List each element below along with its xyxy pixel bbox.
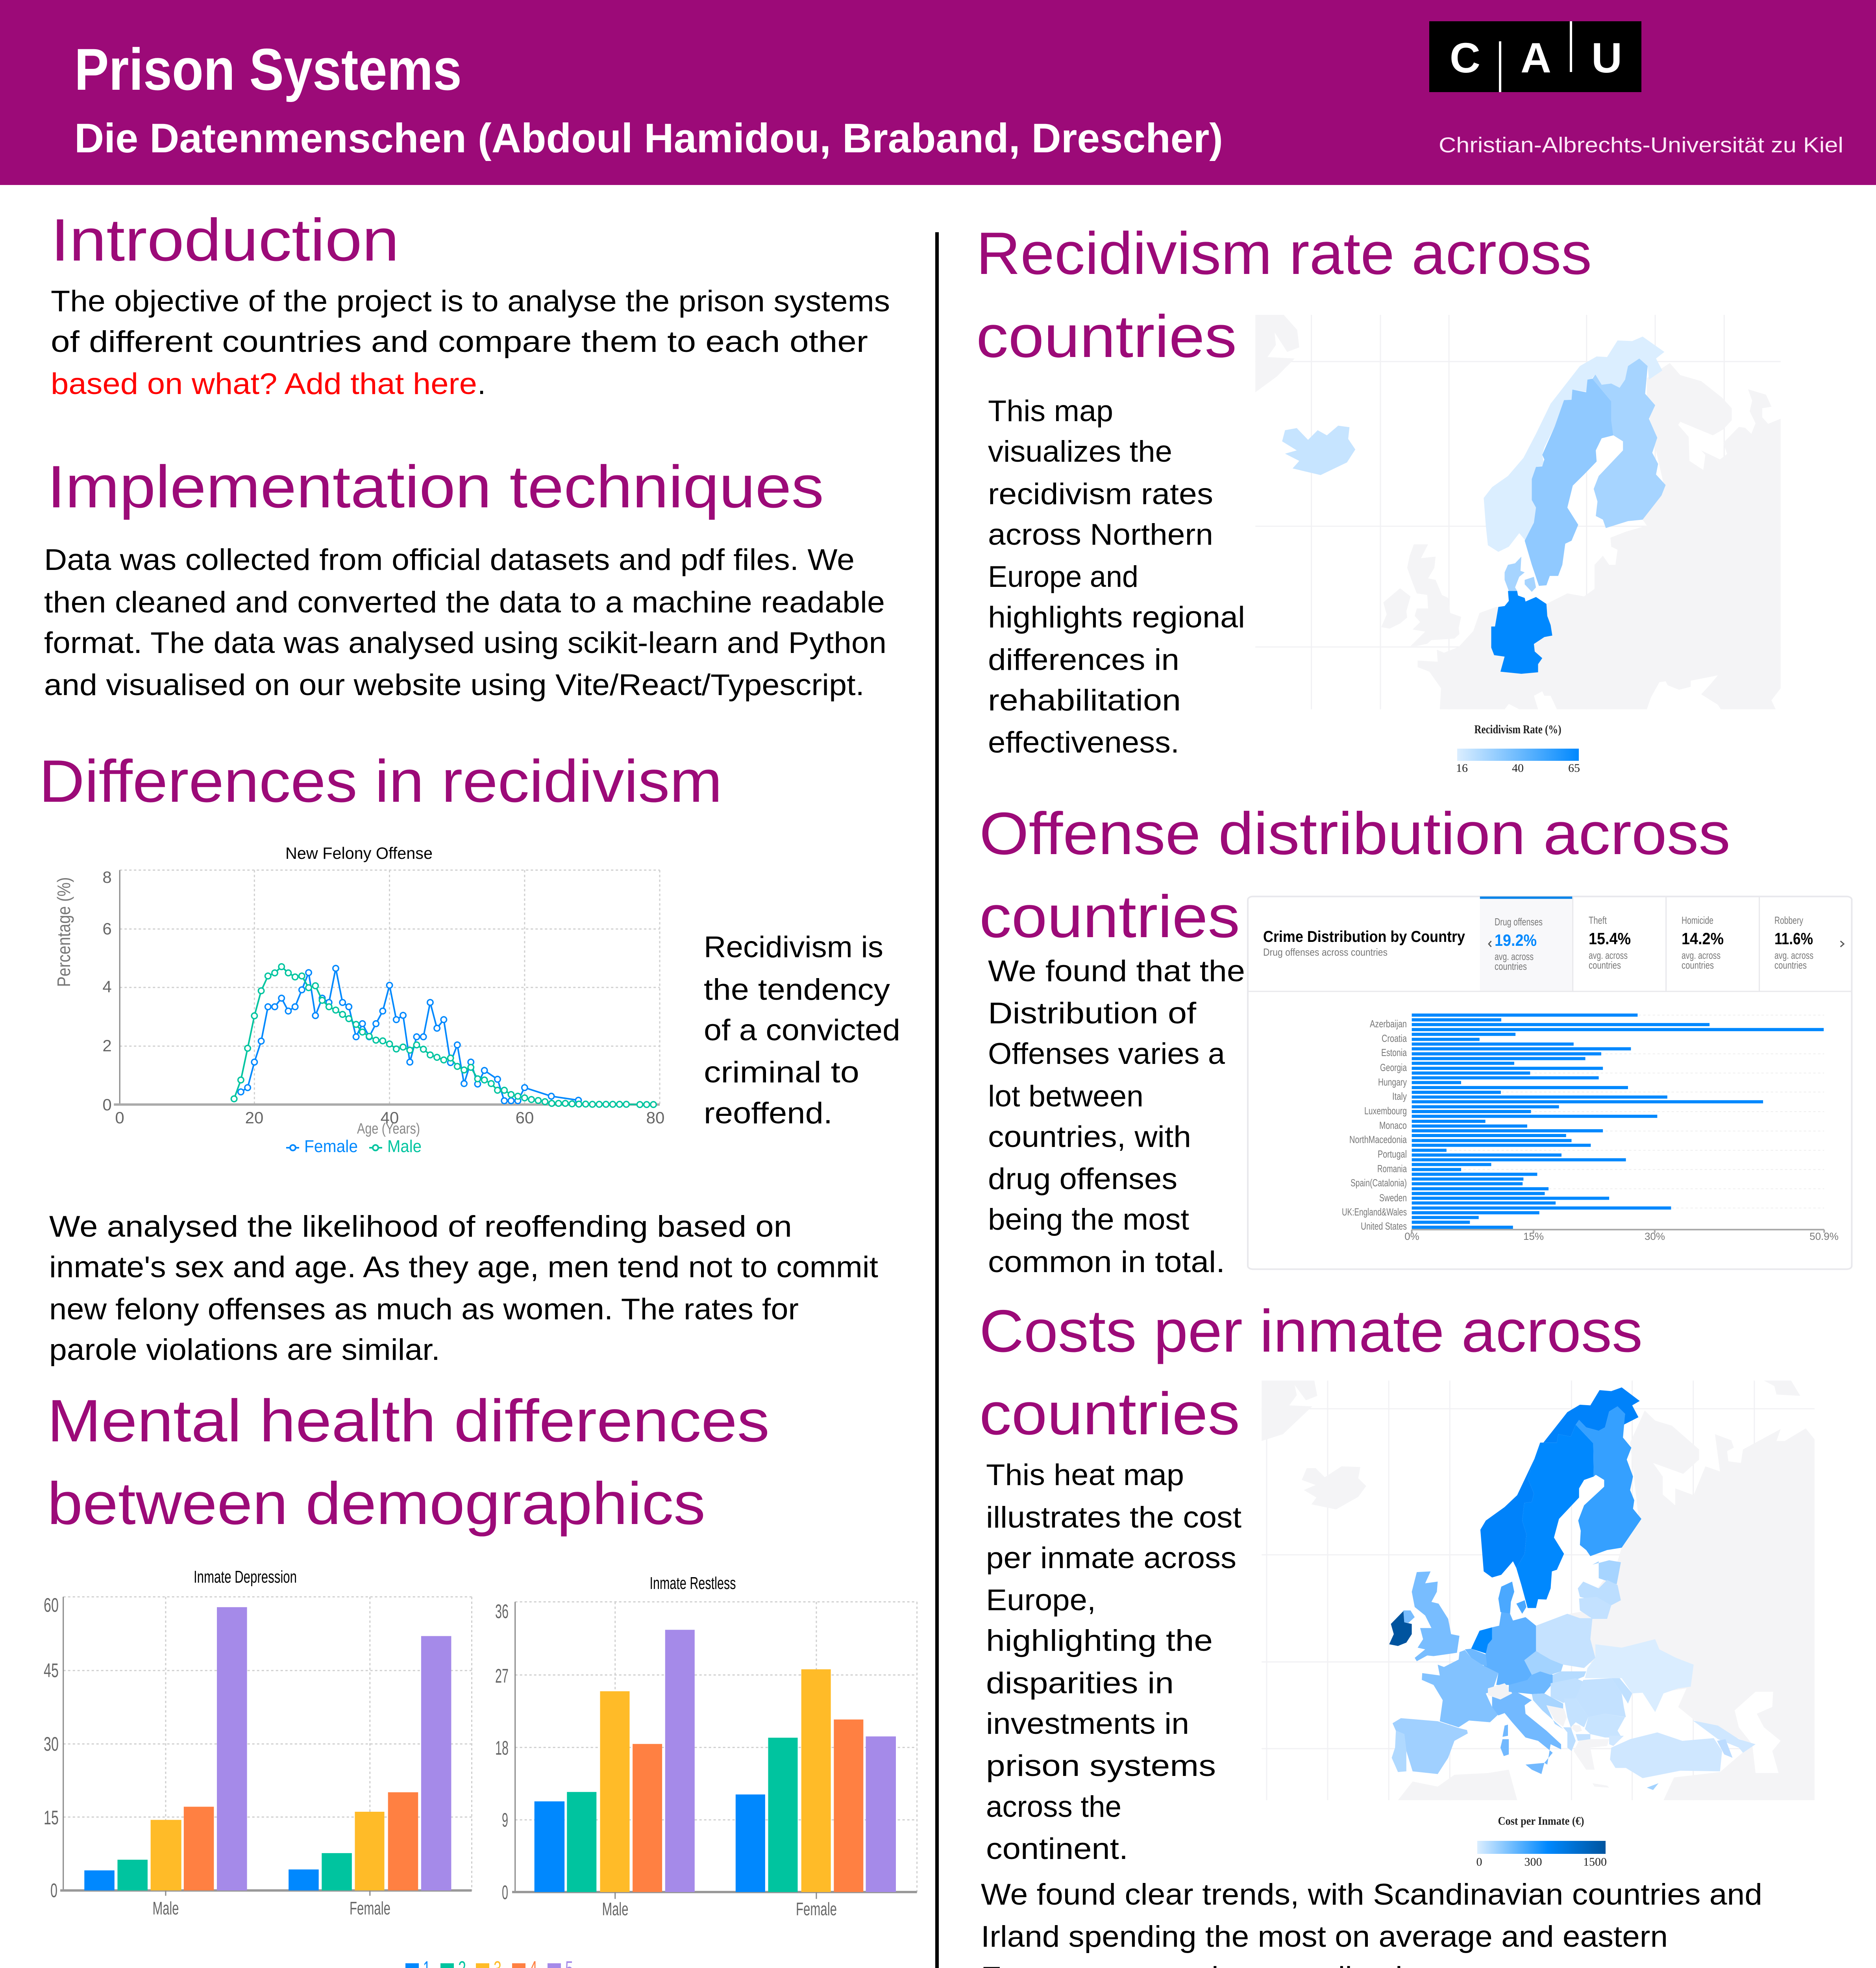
text: recidivism definition: the tendency xyxy=(704,973,890,1006)
legend: recidivism rate xyxy=(1456,722,1580,775)
map: recidivism rate northern Europe xyxy=(1255,315,1781,775)
text: cost trends xyxy=(981,1878,1762,1968)
text: recidivism map description: rehabilitation xyxy=(988,684,1181,717)
text: cost map description: per inmate across xyxy=(986,1541,1236,1575)
chart: inmate depression bars: 45 xyxy=(44,1659,59,1681)
text: recidivism definition: Recidivism is xyxy=(704,930,883,964)
country: Sweden xyxy=(1525,379,1613,586)
text: reoffending analysis: We analysed the likelihood of reoffending based on xyxy=(49,1210,792,1243)
chart: inmate restless bars: Male xyxy=(602,1899,628,1919)
legend: female / male: Male xyxy=(387,1137,422,1156)
bar chart labels: Croatia xyxy=(1382,1032,1407,1044)
text: recidivism map description: across Northern xyxy=(988,518,1213,551)
text: offense distribution description xyxy=(988,954,1245,1279)
text: reoffending analysis: new felony offenses as much as women. The rates for xyxy=(49,1293,799,1326)
card title: Crime Distribution by Country xyxy=(1263,928,1465,945)
text: cost trends: We found clear trends, with Scandinavian countries and xyxy=(981,1878,1762,1911)
text: recidivism map description: recidivism rates xyxy=(988,477,1213,511)
country: Sweden xyxy=(1516,1425,1594,1608)
text: recidivism map description: differences in xyxy=(988,643,1179,677)
legend: recidivism rate: Recidivism Rate (%) xyxy=(1475,722,1561,736)
text: offense distribution description: common in total. xyxy=(988,1245,1225,1279)
chart: new felony offense line chart: 60 xyxy=(516,1108,534,1127)
tab: drug offenses: avg. across xyxy=(1495,951,1534,962)
country: Germany xyxy=(1491,591,1552,674)
text: cost map description: illustrates the cost xyxy=(986,1501,1241,1534)
icon: CAU logo: U xyxy=(1591,34,1622,81)
text: recidivism definition: of a convicted xyxy=(704,1014,900,1047)
tab: drug offenses: countries xyxy=(1495,960,1527,972)
tab: theft: Theft xyxy=(1589,914,1607,926)
authors subtitle: Die Datenmenschen (Abdoul Hamidou, Braband, Drescher) xyxy=(74,115,1223,161)
text: implementation xyxy=(44,543,886,702)
bar chart labels: 0% xyxy=(1404,1230,1419,1242)
legend: cost per inmate xyxy=(1476,1814,1607,1868)
title: Prison Systems xyxy=(74,36,462,102)
bar chart labels: Portugal xyxy=(1378,1148,1407,1160)
tab: drug offenses: 19.2% xyxy=(1495,931,1537,949)
text: cost map description: This heat map xyxy=(986,1458,1184,1492)
chart: new felony offense line chart xyxy=(54,844,664,1156)
text: cost map description: disparities in xyxy=(986,1667,1174,1700)
chart: new felony offense line chart: Age (Years) xyxy=(357,1121,420,1137)
text: recidivism definition: criminal to xyxy=(704,1056,859,1089)
legend: female / male xyxy=(286,1137,422,1156)
icon: CAU logo: A xyxy=(1521,34,1551,81)
bar chart labels: 30% xyxy=(1645,1230,1665,1242)
heading: implementation techniques: Implementation techniques xyxy=(47,453,824,520)
country: Iceland xyxy=(1282,426,1355,475)
tab: robbery: countries xyxy=(1774,959,1807,971)
map: cost per inmate Europe xyxy=(1262,1381,1815,1868)
chart: new felony offense line chart: 80 xyxy=(646,1108,664,1127)
legend: recidivism rate: 65 xyxy=(1568,762,1580,775)
chart: inmate depression bars: 0 xyxy=(50,1879,57,1901)
text: implementation: then cleaned and converted the data to a machine readable xyxy=(44,586,885,619)
text: cost map description xyxy=(986,1458,1241,1866)
icon: CAU logo: C xyxy=(1450,34,1480,81)
tab: homicide xyxy=(1682,914,1724,971)
chart: inmate depression bars xyxy=(44,1567,472,1918)
heading: differences in recidivism: Differences in recidivism xyxy=(39,748,722,815)
legend: cost per inmate: 1500 xyxy=(1583,1855,1607,1868)
tab: robbery: avg. across xyxy=(1774,949,1813,961)
legend: female / male: Female xyxy=(304,1137,358,1156)
text: cost map description: prison systems xyxy=(986,1749,1216,1783)
chart: new felony offense line chart: 2 xyxy=(102,1036,112,1055)
text: offense distribution description: drug offenses xyxy=(988,1162,1177,1196)
icon: CAU logo xyxy=(1429,21,1641,92)
text: offense distribution description: We found that the xyxy=(988,954,1245,988)
chart: inmate restless bars: Inmate Restless xyxy=(649,1574,736,1593)
chart: new felony offense line chart: 20 xyxy=(245,1108,263,1127)
heading: introduction: Introduction xyxy=(51,207,399,274)
text: reoffending analysis: parole violations are similar. xyxy=(49,1333,440,1367)
bar chart labels: Monaco xyxy=(1379,1119,1407,1131)
legend: cost per inmate: 300 xyxy=(1524,1855,1542,1868)
bar chart labels: Sweden xyxy=(1379,1192,1407,1204)
text: recidivism map description: visualizes the xyxy=(988,435,1172,468)
bar chart labels: Azerbaijan xyxy=(1370,1018,1407,1030)
chart: inmate depression bars: Male xyxy=(153,1898,179,1918)
heading: offense distribution across countries: Offense distribution across xyxy=(979,800,1730,867)
chart: inmate restless bars: 27 xyxy=(495,1665,509,1687)
text: reoffending analysis xyxy=(49,1210,878,1367)
bar chart labels: Georgia xyxy=(1380,1062,1407,1073)
heading: mental health differences xyxy=(47,1387,770,1537)
chart: inmate restless bars: 9 xyxy=(502,1809,508,1831)
chart: new felony offense line chart: New Felony Offense xyxy=(285,844,433,862)
text: introduction xyxy=(51,285,890,401)
chart: new felony offense line chart: 0 xyxy=(115,1108,124,1127)
heading: recidivism rate across countries: countries xyxy=(976,303,1237,370)
bar chart labels: Hungary xyxy=(1378,1076,1407,1088)
university name: Christian-Albrechts-Universität zu Kiel xyxy=(1439,133,1843,157)
tab: homicide: 14.2% xyxy=(1682,929,1724,948)
panel: crime distribution card: Drug offenses across countries xyxy=(1263,946,1388,958)
chart: new felony offense line chart: 4 xyxy=(102,977,112,996)
text: introduction: based on what? Add that here xyxy=(51,367,477,401)
bar chart labels: UK:England&Wales xyxy=(1342,1206,1407,1218)
text: recidivism map description: Europe and xyxy=(988,560,1138,594)
legend: recidivism rate: 40 xyxy=(1512,762,1524,775)
tab: theft xyxy=(1589,914,1631,971)
legend: recidivism rate: 16 xyxy=(1456,762,1468,775)
tab: homicide: countries xyxy=(1682,959,1714,971)
text: cost map description: Europe, xyxy=(986,1583,1096,1617)
bar chart labels: Estonia xyxy=(1381,1047,1407,1058)
chart: inmate restless bars xyxy=(495,1574,917,1919)
country: Norway xyxy=(1480,1387,1640,1578)
chart: inmate restless bars: 18 xyxy=(495,1737,509,1759)
country: Finland xyxy=(1576,1406,1641,1556)
text: introduction: . xyxy=(477,367,486,401)
country: Norway xyxy=(1484,337,1664,552)
bar chart labels xyxy=(1342,1018,1839,1242)
text: recidivism map description: highlights regional xyxy=(988,601,1245,634)
text: offense distribution description: Offenses varies a xyxy=(988,1037,1225,1071)
heading: recidivism rate across countries: Recidivism rate across xyxy=(976,220,1592,287)
text: cost trends: Irland spending the most on average and eastern xyxy=(981,1920,1668,1953)
bar chart labels: United States xyxy=(1361,1220,1407,1232)
text: offense distribution description: lot between xyxy=(988,1080,1143,1113)
heading: costs per inmate across countries xyxy=(979,1298,1643,1447)
chart: inmate depression bars: Inmate Depression xyxy=(194,1567,297,1587)
heading: mental health differences: between demographics xyxy=(47,1470,705,1537)
tab: theft: countries xyxy=(1589,959,1621,971)
text: recidivism map description: This map xyxy=(988,394,1113,428)
bar chart labels: NorthMacedonia xyxy=(1349,1134,1407,1145)
text: offense distribution description: being the most xyxy=(988,1203,1189,1236)
countries: central, western and southern Europe xyxy=(1389,1560,1756,1790)
text: recidivism definition xyxy=(704,930,900,1130)
chart: inmate depression bars: 15 xyxy=(44,1807,59,1829)
tab: drug offenses xyxy=(1495,916,1543,972)
bar chart labels: 50.9% xyxy=(1809,1230,1839,1242)
text: cost map description: investments in xyxy=(986,1707,1189,1740)
heading: offense distribution across countries xyxy=(979,800,1730,950)
heading: offense distribution across countries: countries xyxy=(979,883,1240,950)
chart: inmate depression bars: 30 xyxy=(44,1733,59,1755)
tab: robbery: 11.6% xyxy=(1774,929,1813,948)
text: implementation: and visualised on our website using Vite/React/Typescript. xyxy=(44,668,864,702)
text: implementation: format. The data was analysed using scikit-learn and Python xyxy=(44,626,886,660)
chart: new felony offense line chart: 6 xyxy=(102,919,112,938)
tab: drug offenses: Drug offenses xyxy=(1495,916,1543,928)
tab: theft: 15.4% xyxy=(1589,929,1631,948)
chart: new felony offense line chart: 8 xyxy=(102,868,112,886)
legend: cost per inmate: 0 xyxy=(1476,1855,1482,1868)
heading: recidivism rate across countries xyxy=(976,220,1592,370)
bar chart labels: Spain(Catalonia) xyxy=(1351,1177,1407,1189)
legend: scale 1 to 5 xyxy=(405,1957,573,1968)
heading: costs per inmate across countries: countries xyxy=(979,1380,1240,1447)
chart: inmate restless bars: Female xyxy=(796,1899,837,1919)
tab: robbery: Robbery xyxy=(1774,914,1803,926)
panel: crime distribution card xyxy=(1248,897,1852,1269)
text: cost map description: across the xyxy=(986,1790,1121,1824)
legend: cost per inmate: Cost per Inmate (€) xyxy=(1498,1814,1584,1827)
tab: theft: avg. across xyxy=(1589,949,1628,961)
chart: new felony offense line chart: 0 xyxy=(102,1095,112,1114)
text: introduction: The objective of the project is to analyse the prison systems xyxy=(51,285,890,318)
bar chart labels: Italy xyxy=(1392,1090,1407,1102)
text: cost map description: continent. xyxy=(986,1832,1128,1866)
tab: homicide: avg. across xyxy=(1682,949,1721,961)
text: recidivism map description: effectiveness. xyxy=(988,726,1179,759)
bar chart labels: 15% xyxy=(1523,1230,1544,1242)
text: reoffending analysis: inmate's sex and age. As they age, men tend not to commit xyxy=(49,1250,878,1284)
heading: costs per inmate across countries: Costs per inmate across xyxy=(979,1298,1643,1365)
text: recidivism map description xyxy=(988,394,1245,759)
chart: new felony offense line chart: 40 xyxy=(381,1108,399,1127)
chart: inmate restless bars: 36 xyxy=(495,1600,509,1622)
divider: vertical xyxy=(935,232,939,1968)
text: introduction: of different countries and compare them to each other xyxy=(51,325,868,359)
chart: inmate depression bars: 60 xyxy=(44,1594,59,1616)
text: implementation: Data was collected from official datasets and pdf files. We xyxy=(44,543,855,577)
country: Denmark xyxy=(1504,557,1536,592)
tab: robbery xyxy=(1774,914,1813,971)
text: recidivism definition: reoffend. xyxy=(704,1097,833,1130)
heading: mental health differences: Mental health differences xyxy=(47,1387,770,1454)
country: Finland xyxy=(1593,359,1666,528)
chart: new felony offense line chart: Percentage (%) xyxy=(54,877,74,987)
bar chart labels: Romania xyxy=(1377,1163,1407,1175)
text: offense distribution description: countries, with xyxy=(988,1120,1191,1154)
chart: inmate depression bars: Female xyxy=(350,1898,390,1918)
tab: homicide: Homicide xyxy=(1682,914,1713,926)
header band xyxy=(0,0,1876,185)
text: offense distribution description: Distribution of xyxy=(988,997,1197,1030)
bar chart labels: Luxembourg xyxy=(1364,1105,1407,1117)
text: cost map description: highlighting the xyxy=(986,1624,1213,1657)
chart: inmate restless bars: 0 xyxy=(502,1881,508,1903)
